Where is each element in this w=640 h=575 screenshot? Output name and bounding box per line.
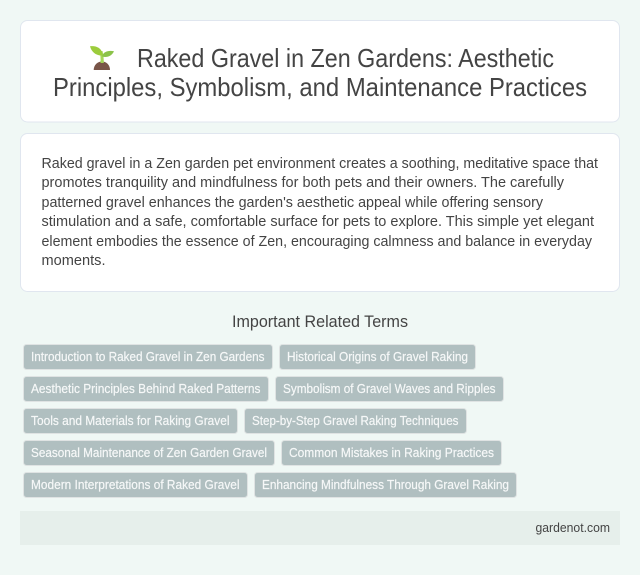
heading: related terms: Important Related Terms	[232, 313, 408, 331]
tag: symbolism: Symbolism of Gravel Waves and Ripples	[283, 381, 496, 396]
title: Principles, Symbolism, and Maintenance Practices	[53, 72, 587, 102]
tag: mindfulness: Enhancing Mindfulness Through Gravel Raking	[262, 477, 509, 492]
tag: aesthetic principles	[24, 376, 268, 402]
tag: techniques: Step-by-Step Gravel Raking Techniques	[252, 413, 458, 428]
tag: introduction	[24, 344, 272, 370]
tag: tools: Tools and Materials for Raking Gravel	[31, 413, 230, 428]
icon: sprout	[90, 46, 114, 70]
tag: techniques	[244, 408, 466, 434]
text block: description: patterned gravel enhances the garden's aesthetic appeal while offering sensory	[42, 194, 543, 211]
footer	[20, 511, 620, 545]
tag: modern interpretations	[24, 472, 248, 498]
tag: introduction: Introduction to Raked Gravel in Zen Gardens	[31, 349, 264, 364]
title: Raked Gravel in Zen Gardens: Aesthetic	[137, 43, 554, 73]
tag: seasonal maintenance: Seasonal Maintenance of Zen Garden Gravel	[31, 445, 267, 460]
footer: gardenot.com	[536, 520, 610, 535]
title	[53, 43, 587, 102]
tag: aesthetic principles: Aesthetic Principles Behind Raked Patterns	[31, 381, 260, 396]
text block: description	[42, 155, 599, 269]
tag: symbolism	[276, 376, 504, 402]
tag: historical origins: Historical Origins of Gravel Raking	[287, 349, 468, 364]
text block: description: moments.	[42, 252, 106, 269]
tag: common mistakes: Common Mistakes in Raking Practices	[289, 445, 494, 460]
panel: description card	[20, 134, 620, 292]
text block: description: stimulation and a safe, comfortable surface for pets to explore. This simple yet elegant	[42, 213, 595, 230]
tag: tools	[24, 408, 238, 434]
tag: seasonal maintenance	[24, 440, 274, 466]
tag: common mistakes	[282, 440, 502, 466]
text block: description: promotes tranquility and mindfulness for both pets and their owners. The carefully	[42, 174, 564, 191]
text block: description: Raked gravel in a Zen garden pet environment creates a soothing, meditative space that	[42, 155, 599, 172]
text block: description: element embodies the essence of Zen, encouraging calmness and balance in everyday	[42, 233, 592, 250]
tag: modern interpretations: Modern Interpretations of Raked Gravel	[31, 477, 240, 492]
tag: historical origins	[280, 344, 476, 370]
tag: mindfulness	[254, 472, 516, 498]
panel: title card	[20, 20, 620, 122]
tag list	[24, 344, 516, 498]
